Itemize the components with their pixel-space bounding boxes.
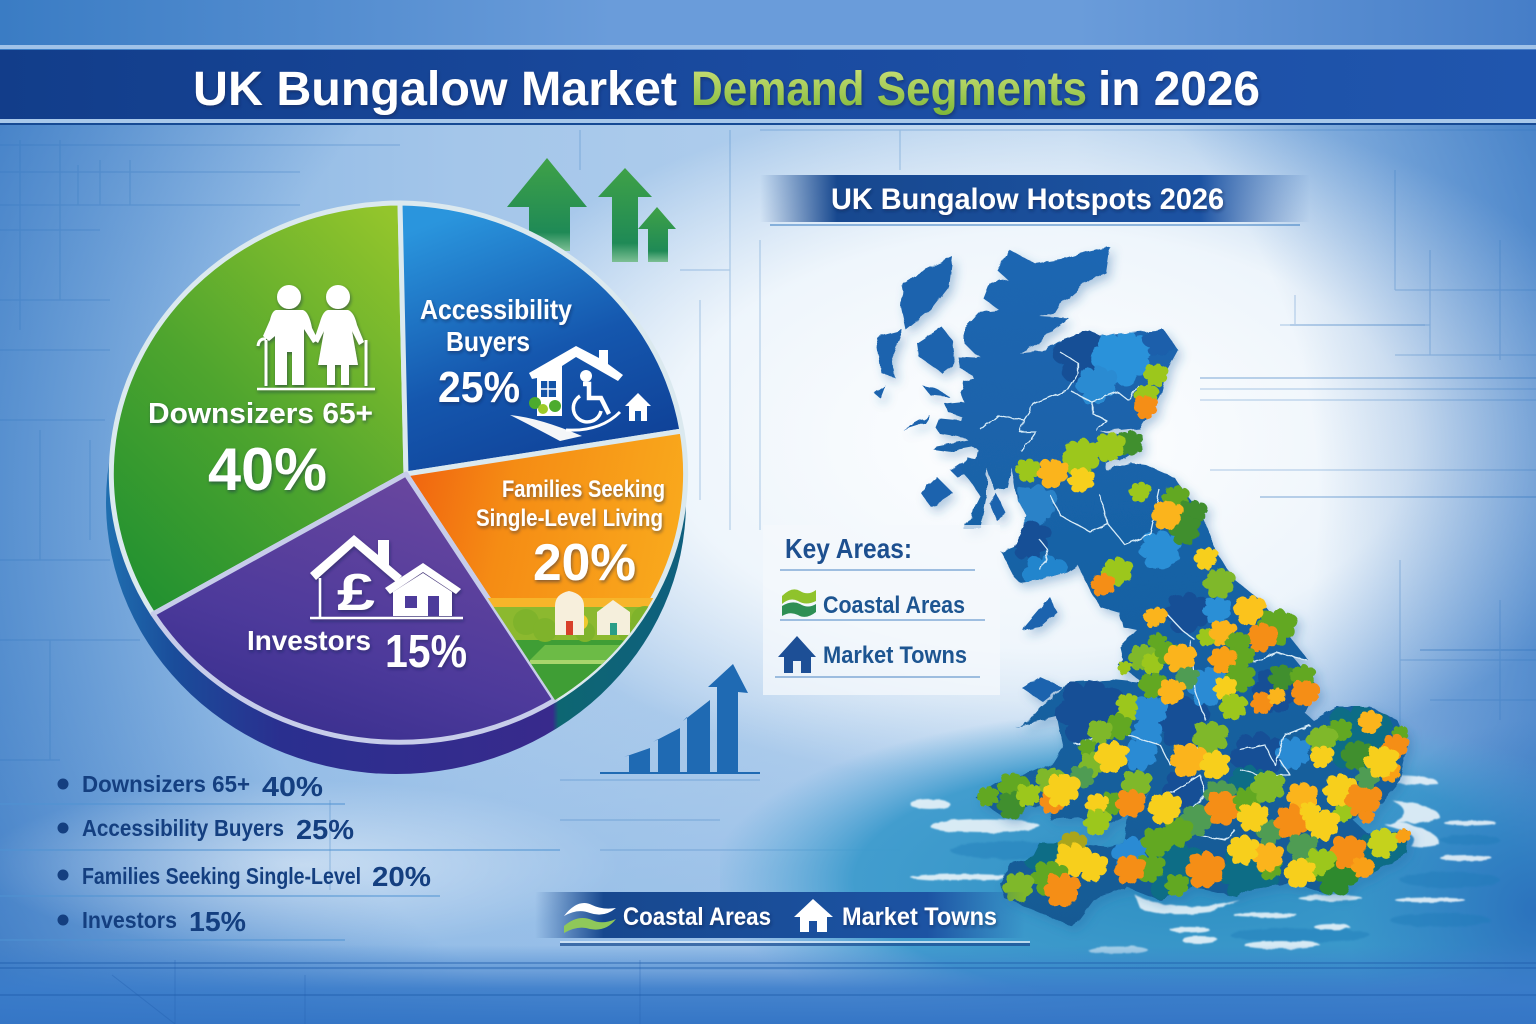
icon: blue bar chart arrow — [600, 664, 760, 774]
title text: Demand Segments — [691, 63, 1087, 116]
mainland — [934, 247, 1408, 927]
item: accessibility: Accessibility Buyers — [82, 815, 284, 841]
key: market towns: Market Towns — [823, 642, 967, 669]
pie 3D side — [106, 230, 686, 774]
slice: downsizers — [111, 203, 406, 614]
label: accessibility — [420, 294, 572, 412]
item: downsizers: Downsizers 65+ — [82, 771, 250, 797]
bottom blue strip — [0, 945, 1536, 1024]
key: market towns — [778, 636, 967, 673]
icon: accessible house — [510, 346, 651, 441]
legend: market towns — [794, 899, 997, 932]
label: downsizers — [148, 398, 373, 503]
label: families: Single-Level Living — [476, 505, 663, 532]
islands — [874, 257, 1062, 702]
icon: green door house — [597, 600, 630, 635]
item: investors: Investors — [82, 907, 177, 933]
slice: accessibility — [400, 203, 682, 474]
label: accessibility: Buyers — [446, 326, 530, 357]
item: accessibility: 25% — [296, 814, 354, 845]
icon: senior couple — [257, 285, 375, 389]
item: downsizers: 40% — [262, 771, 323, 802]
slice: families — [406, 431, 686, 700]
UK map — [874, 247, 1411, 927]
label: investors: 15% — [385, 625, 467, 677]
label: accessibility: 25% — [438, 363, 520, 412]
item: downsizers — [58, 771, 323, 802]
item: investors: 15% — [189, 906, 246, 937]
hotspots heading — [760, 175, 1310, 226]
hotspots heading: UK Bungalow Hotspots 2026 — [831, 183, 1224, 216]
segment list — [0, 771, 560, 940]
label: accessibility: Accessibility — [420, 294, 572, 325]
key: coastal areas: Coastal Areas — [823, 592, 965, 619]
item: families: Families Seeking Single-Level — [82, 863, 361, 889]
legend: coastal areas: Coastal Areas — [623, 903, 771, 931]
label: investors — [247, 625, 467, 677]
icon: small house — [625, 393, 651, 421]
label: downsizers: 40% — [208, 436, 327, 503]
icon: red door house — [555, 591, 584, 635]
key: coastal areas — [782, 589, 965, 619]
sea — [720, 720, 1536, 1024]
item: accessibility — [58, 814, 354, 845]
key heading: Key Areas: — [785, 533, 912, 564]
label: families — [476, 476, 665, 592]
item: families: 20% — [372, 861, 431, 892]
region tints — [1009, 323, 1410, 903]
title text: UK Bungalow Market — [193, 63, 677, 116]
region borders — [981, 352, 1310, 840]
label: investors: Investors — [247, 625, 371, 656]
label: downsizers: Downsizers 65+ — [148, 398, 373, 430]
label: families: Families Seeking — [502, 476, 665, 503]
title text: in 2026 — [1098, 63, 1260, 116]
slice: investors — [153, 474, 555, 742]
bottom legend band — [535, 892, 1030, 946]
pie chart — [106, 203, 700, 774]
item: investors — [58, 906, 246, 937]
key areas panel — [763, 525, 1000, 695]
title bar — [0, 45, 1536, 125]
hotspot blobs — [977, 364, 1411, 907]
icon: green growth arrows — [507, 158, 676, 262]
label: families: 20% — [533, 534, 636, 592]
landscape in families slice — [488, 591, 654, 700]
icon: investor houses with pound: £ — [337, 564, 375, 622]
legend: coastal areas — [564, 903, 771, 933]
title text — [193, 63, 1260, 116]
icon: investor houses with pound — [310, 535, 463, 622]
legend: market towns: Market Towns — [842, 903, 997, 931]
